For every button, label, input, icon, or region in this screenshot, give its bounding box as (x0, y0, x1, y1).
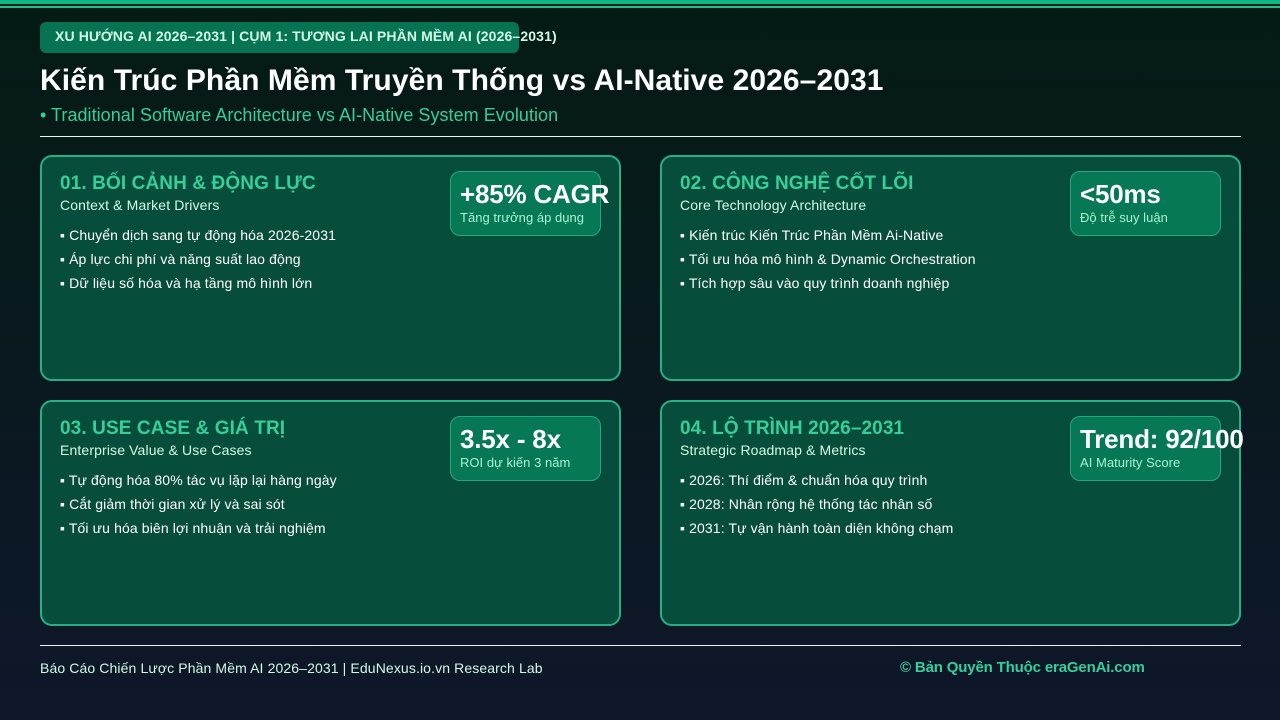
bullet list 04: ▪ 2031: Tự vận hành toàn diện không chạm (680, 520, 953, 536)
metric: ROI (450, 416, 601, 481)
metric caption: Tăng trưởng áp dụng (460, 210, 584, 225)
bullet list 02: ▪ Tích hợp sâu vào quy trình doanh nghiệp (680, 275, 949, 291)
subheading 02: Core Technology Architecture (680, 197, 866, 213)
heading 04: 04. LỘ TRÌNH 2026–2031 (680, 418, 904, 439)
heading 03: 03. USE CASE & GIÁ TRỊ (60, 418, 285, 439)
bullet list 01: ▪ Chuyển dịch sang tự động hóa 2026-2031 (60, 227, 336, 243)
metric caption: AI Maturity Score (1080, 455, 1180, 470)
bullet list 03: ▪ Tự động hóa 80% tác vụ lặp lại hàng ngày (60, 472, 337, 488)
bullet list 01 (60, 227, 336, 291)
bullet list 04: ▪ 2028: Nhân rộng hệ thống tác nhân số (680, 496, 932, 512)
panel: 04 roadmap (660, 400, 1241, 626)
bullet list 03 (60, 472, 337, 536)
bullet list 02: ▪ Kiến trúc Kiến Trúc Phần Mềm Ai-Native (680, 227, 943, 243)
metric value: 3.5x - 8x (460, 424, 561, 454)
category badge (40, 22, 519, 53)
panel: 02 core technology (660, 155, 1241, 381)
badge text: XU HƯỚNG AI 2026–2031 | CỤM 1: TƯƠNG LAI PHẦN MỀM AI (2026–2031) (55, 28, 557, 44)
bullet list 02 (680, 227, 976, 291)
subheading 01: Context & Market Drivers (60, 197, 220, 213)
bullet list 02: ▪ Tối ưu hóa mô hình & Dynamic Orchestration (680, 251, 976, 267)
metric caption: ROI dự kiến 3 năm (460, 455, 570, 470)
footer copyright: © Bản Quyền Thuộc eraGenAi.com (900, 659, 1145, 676)
subheading 04: Strategic Roadmap & Metrics (680, 442, 866, 458)
metric: CAGR (450, 171, 601, 236)
bullet list 04 (680, 472, 953, 536)
metric value: +85% CAGR (460, 179, 609, 209)
footer source: Báo Cáo Chiến Lược Phần Mềm AI 2026–2031 | EduNexus.io.vn Research Lab (40, 660, 543, 676)
heading 01: 01. BỐI CẢNH & ĐỘNG LỰC (60, 173, 316, 194)
top accent bar (0, 0, 1280, 8)
panel: 03 use cases (40, 400, 621, 626)
title: Kiến Trúc Phần Mềm Truyền Thống vs AI-Native 2026–2031 (40, 64, 884, 97)
panel: 01 context (40, 155, 621, 381)
metric: latency (1070, 171, 1221, 236)
subtitle: • Traditional Software Architecture vs AI-Native System Evolution (40, 105, 558, 125)
subheading 03: Enterprise Value & Use Cases (60, 442, 252, 458)
bullet list 04: ▪ 2026: Thí điểm & chuẩn hóa quy trình (680, 472, 927, 488)
metric value: Trend: 92/100 (1080, 424, 1244, 454)
bullet list 03: ▪ Cắt giảm thời gian xử lý và sai sót (60, 496, 285, 512)
metric: trend score (1070, 416, 1221, 481)
bullet list 01: ▪ Dữ liệu số hóa và hạ tầng mô hình lớn (60, 275, 312, 291)
heading 02: 02. CÔNG NGHỆ CỐT LÕI (680, 173, 914, 194)
bullet list 01: ▪ Áp lực chi phí và năng suất lao động (60, 251, 301, 267)
bullet list 03: ▪ Tối ưu hóa biên lợi nhuận và trải nghiệm (60, 520, 326, 536)
metric caption: Độ trễ suy luận (1080, 210, 1168, 225)
metric value: <50ms (1080, 179, 1161, 209)
